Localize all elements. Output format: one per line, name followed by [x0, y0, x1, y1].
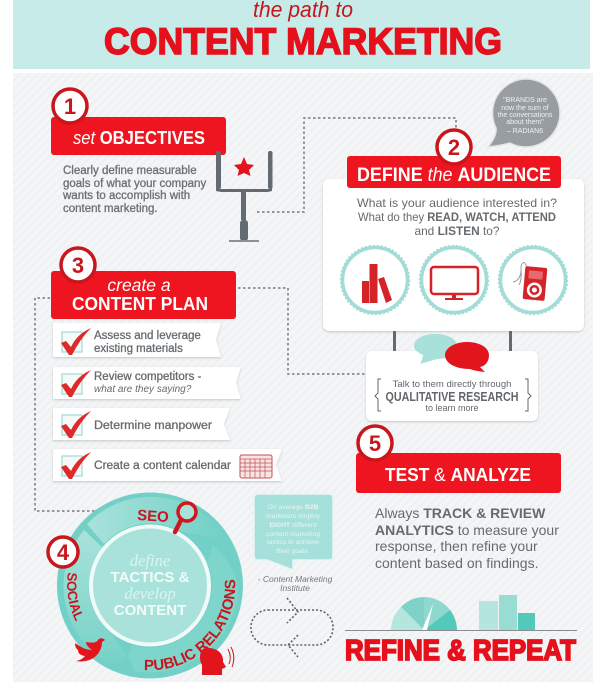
label: SOCIAL: SOCIAL	[67, 572, 82, 622]
center circle: TACTICS &	[111, 569, 190, 586]
icon: red speech bubble	[445, 342, 489, 372]
text: objectives description: goals of what your company	[63, 178, 206, 190]
checklist item: assess	[53, 323, 221, 357]
step 3	[51, 248, 282, 481]
checklist item: manpower	[53, 408, 230, 440]
text: analytics description: content based on findings.	[375, 555, 538, 571]
text: objectives description: Clearly define measurable	[63, 165, 197, 177]
badge 3	[61, 248, 95, 282]
connector: step 3 to research	[238, 288, 365, 374]
badge 3: 3	[72, 253, 84, 278]
center circle	[91, 526, 209, 644]
icon: goal post with star	[216, 151, 272, 242]
chart: bars	[479, 595, 535, 630]
quote bubble: about them"	[506, 119, 544, 126]
text: objectives description: content marketing.	[63, 203, 158, 215]
text: analytics description: Always TRACK & REVIEW	[375, 505, 545, 521]
checklist item: review competitors: Review competitors -	[94, 371, 202, 383]
heading: test and analyze: TEST & ANALYZE	[385, 464, 531, 485]
wheel arrow segments	[64, 497, 238, 672]
heading: refine and repeat: REFINE & REPEAT	[345, 635, 576, 667]
connector: step 1 to step 2	[257, 118, 456, 212]
text: qualitative research: to learn more	[425, 403, 479, 413]
quote bubble: the conversations	[498, 112, 553, 119]
badge 1: 1	[64, 94, 76, 119]
text: qualitative research: Talk to them directly through	[393, 379, 511, 390]
checklist item: calendar	[53, 449, 282, 481]
center circle: develop	[124, 584, 176, 603]
step 5	[356, 426, 561, 571]
checklist item: calendar: Create a content calendar	[94, 460, 231, 472]
icon: teal speech bubble	[414, 334, 457, 364]
statistic bubble	[254, 494, 333, 570]
icon: speaking head	[200, 647, 234, 675]
title header	[13, 0, 590, 69]
badge 1	[53, 89, 87, 123]
checklist item: assess: existing materials	[94, 343, 183, 355]
heading: define the audience: DEFINE the AUDIENCE	[357, 165, 551, 186]
icon: calendar	[240, 455, 272, 478]
label: SEO: SEO	[137, 507, 170, 526]
label: PUBLIC RELATIONS: PUBLIC RELATIONS	[144, 580, 236, 670]
heading: test and analyze	[356, 453, 561, 493]
quote bubble: – RADIAN6	[507, 128, 543, 135]
heading: set objectives	[51, 117, 226, 155]
icon: music player	[498, 246, 568, 314]
step 4: tactics wheel	[46, 492, 243, 678]
text: audience questions: What do they READ, WATCH, ATTEND	[358, 210, 565, 224]
icon: magnifier	[175, 503, 196, 532]
heading: create a content plan: CONTENT PLAN	[72, 294, 208, 314]
statistic bubble: On average B2B	[267, 504, 319, 511]
connector posts	[393, 331, 512, 351]
title header: CONTENT MARKETING	[104, 21, 502, 62]
center circle: CONTENT	[114, 602, 186, 619]
quote bubble: now the sum of	[501, 105, 549, 112]
heading: create a content plan	[51, 271, 236, 319]
icon: television	[420, 246, 488, 314]
icon: twitter bird	[75, 638, 105, 661]
curly brackets	[375, 379, 531, 411]
checklist item: review competitors	[53, 367, 241, 399]
badge 5	[358, 426, 392, 460]
quote bubble: "BRANDS are	[503, 97, 547, 104]
quote bubble	[488, 79, 560, 147]
baseline rule	[345, 630, 577, 631]
statistic bubble: their goals.	[276, 548, 310, 555]
statistic bubble: marketers employ	[266, 513, 321, 520]
statistic bubble: tactics to achieve	[267, 539, 319, 546]
text: objectives description: wants to accomplish with	[62, 190, 190, 202]
badge 2: 2	[448, 135, 460, 160]
text: analytics description: response, then refine your	[375, 538, 538, 554]
heading: define the audience	[347, 156, 561, 188]
badge 4	[48, 537, 78, 567]
panel: qualitative research	[366, 334, 538, 421]
text: attribution: Institute	[280, 583, 310, 593]
statistic bubble: EIGHT different	[269, 522, 317, 529]
checklist item: assess: Assess and leverage	[94, 330, 201, 342]
badge 5: 5	[369, 431, 381, 456]
icon: dotted cycle arrows	[251, 598, 333, 657]
text: qualitative research: QUALITATIVE RESEARCH	[386, 390, 518, 404]
text: analytics description: ANALYTICS to measure your	[375, 522, 559, 538]
badge 2	[437, 130, 471, 164]
badge 4: 4	[57, 540, 70, 565]
statistic bubble: content marketing	[266, 531, 320, 538]
connector: step 3 to step 4	[35, 298, 100, 511]
heading: set objectives: set OBJECTIVES	[73, 127, 205, 148]
step 2	[323, 130, 584, 331]
center circle: define	[130, 551, 170, 570]
text: attribution: - Content Marketing	[258, 574, 333, 584]
step 1	[51, 89, 272, 242]
chart: pie gauge	[391, 597, 457, 630]
icon: books	[340, 246, 410, 314]
heading: create a content plan: create a	[107, 275, 171, 295]
checklist item: manpower: Determine manpower	[94, 420, 212, 432]
panel: audience	[323, 179, 584, 331]
text: audience questions: What is your audience interested in?	[357, 196, 557, 210]
checklist item: review competitors: what are they saying?	[94, 384, 192, 395]
text: audience questions: and LISTEN to?	[414, 224, 500, 238]
